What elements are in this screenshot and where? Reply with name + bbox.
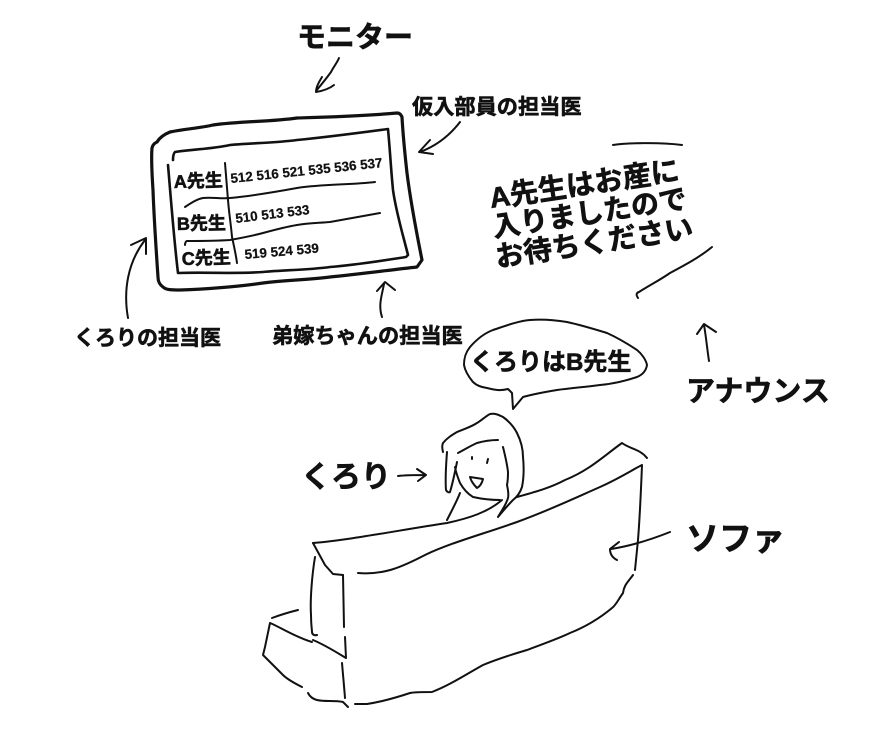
announcement text: A先生はお産に bbox=[487, 155, 682, 215]
label: sofa: ソファ bbox=[686, 520, 785, 557]
announcement top stroke bbox=[613, 143, 682, 145]
heading: monitor: モニター bbox=[297, 21, 413, 54]
sofa side panel bbox=[311, 557, 346, 658]
sofa bottom edge bbox=[355, 575, 633, 704]
body bbox=[447, 493, 460, 520]
hair bbox=[442, 414, 524, 517]
announcement text: お待ちください bbox=[493, 213, 695, 274]
teacher A row: A先生 bbox=[173, 170, 223, 192]
arrow: Kurori's doctor bbox=[126, 238, 146, 318]
label: Kurori: くろり bbox=[301, 461, 391, 494]
speech bubble bbox=[464, 320, 647, 409]
arrow: provisional member's doctor bbox=[419, 122, 460, 154]
arrow: Kurori bbox=[398, 469, 426, 481]
mouth bbox=[470, 477, 483, 488]
label: sister-in-law's doctor: 弟嫁ちゃんの担当医 bbox=[272, 324, 463, 348]
panel: sofa bbox=[263, 443, 647, 707]
sofa front vertical bbox=[342, 663, 345, 698]
teacher C row: C先生 bbox=[181, 247, 231, 269]
announcement bottom stroke bbox=[637, 247, 712, 298]
person: Kurori bbox=[442, 414, 524, 520]
speech bubble text: くろりはB先生 bbox=[470, 349, 631, 376]
arrow: sofa bbox=[610, 532, 670, 560]
arrow: monitor label to monitor bbox=[316, 58, 339, 92]
teacher B row: B先生 bbox=[177, 213, 226, 234]
sofa backrest front edge bbox=[313, 465, 642, 575]
label: Kurori's doctor: くろりの担当医 bbox=[74, 327, 221, 350]
table row line 1 bbox=[185, 182, 375, 207]
teacher C row bbox=[181, 241, 319, 269]
eyes bbox=[472, 457, 488, 463]
announcement text bbox=[487, 155, 695, 274]
table row line 2 bbox=[185, 213, 380, 245]
monitor inner frame bbox=[168, 129, 408, 273]
fringe bbox=[458, 440, 498, 453]
table column divider bbox=[225, 163, 237, 263]
sofa seat bbox=[263, 610, 348, 707]
teacher A row bbox=[173, 155, 383, 192]
arrow: sister-in-law's doctor bbox=[377, 282, 395, 317]
sofa backrest top bbox=[313, 443, 647, 543]
panel: monitor bbox=[152, 113, 422, 290]
arrow: announcement bbox=[697, 324, 716, 361]
label: provisional member's doctor: 仮入部員の担当医 bbox=[412, 95, 582, 119]
teacher B row bbox=[177, 202, 310, 234]
label: announcement: アナウンス bbox=[686, 376, 830, 408]
announcement text: 入りましたので bbox=[490, 183, 689, 243]
teacher B row: 510 513 533 bbox=[235, 202, 310, 226]
face bbox=[455, 467, 500, 500]
side hair bbox=[446, 452, 457, 492]
teacher A row: 512 516 521 535 536 537 bbox=[230, 155, 383, 186]
monitor outer frame bbox=[152, 113, 422, 290]
teacher C row: 519 524 539 bbox=[244, 241, 319, 262]
